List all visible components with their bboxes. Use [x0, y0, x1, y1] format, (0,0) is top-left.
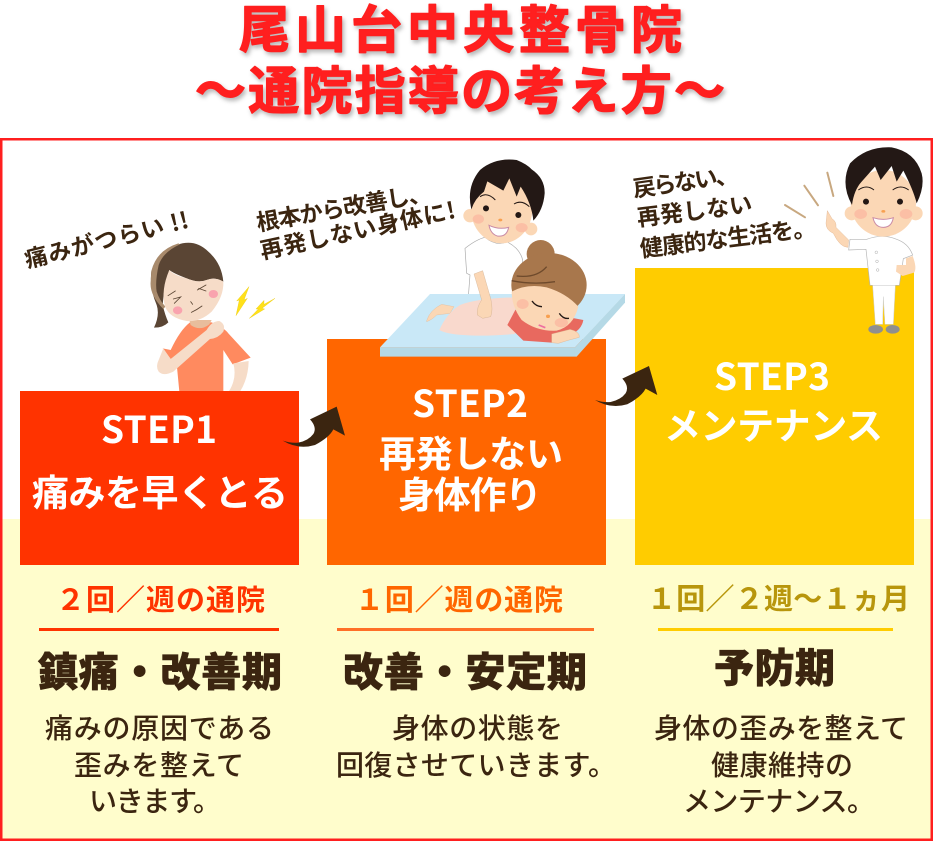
visit frequency 3: １回／２週〜１ヵ月 [647, 576, 910, 618]
panel: step 2 box: 再発しない [379, 424, 563, 478]
panel: step 1 box: STEP1 [101, 400, 217, 454]
speech: step 3: 戻らない、 [630, 156, 740, 204]
column 3 details [647, 576, 910, 820]
column 1 details [38, 577, 282, 820]
patient head [507, 240, 587, 343]
treatment table [380, 294, 625, 357]
speech: step 1: 痛みがつらい !! [20, 201, 192, 275]
description 1: 痛みの原因である [45, 707, 274, 747]
phase heading 3: 予防期 [714, 636, 835, 694]
panel: step 3 box [635, 268, 914, 565]
visit frequency 2: １回／週の通院 [355, 577, 563, 619]
arrow: step 2 to step 3 [595, 366, 657, 406]
speech: step 2: 再発しない身体に! [256, 191, 458, 266]
description 3: メンテナンス。 [683, 780, 875, 820]
description 3: 身体の歪みを整えて [654, 707, 908, 747]
panel: step 1 box: 痛みを早くとる [32, 463, 288, 517]
speech: step 3: 再発しない [635, 185, 754, 233]
description 3: 健康維持の [711, 744, 853, 784]
description 1: 歪みを整えて [74, 744, 244, 784]
panel: step 3 box: STEP3 [714, 347, 830, 401]
therapist head [463, 160, 545, 243]
description 2 [336, 707, 616, 784]
visit frequency 1: ２回／週の通院 [56, 577, 265, 619]
panel: step 2 box: STEP2 [412, 374, 528, 428]
illustration: therapist massaging patient [380, 160, 625, 357]
therapist arm on back [474, 271, 492, 318]
column 2 details [336, 577, 616, 784]
panel: step 1 box [20, 391, 299, 565]
pain sparks [236, 287, 249, 316]
speech: step 3: 健康的な生活を。 [638, 209, 818, 264]
title: 〜通院指導の考え方〜 [195, 50, 725, 124]
panel: step 2 box: 身体作り [398, 465, 542, 519]
face lines [168, 285, 206, 312]
description 1: いきます。 [89, 780, 221, 820]
patient body [427, 297, 515, 336]
phase heading 2: 改善・安定期 [343, 640, 587, 698]
emphasis lines [785, 173, 833, 217]
illustration: therapist pointing [785, 147, 923, 334]
speech: step 2: 根本から改善し、 [253, 174, 434, 238]
phase heading 1: 鎮痛・改善期 [38, 640, 282, 698]
panel: step 2 box [327, 339, 606, 565]
cheeks [173, 290, 218, 314]
arrow: step 1 to step 2 [283, 407, 345, 447]
description 2: 回復させていきます。 [336, 744, 616, 784]
illustration: woman in pain [151, 243, 275, 392]
title [195, 0, 725, 124]
speech: step 3 [630, 156, 818, 264]
description 3 [654, 707, 908, 820]
description 1 [45, 707, 274, 820]
panel: step 3 box: メンテナンス [664, 396, 883, 450]
description 2: 身体の状態を [392, 707, 563, 747]
